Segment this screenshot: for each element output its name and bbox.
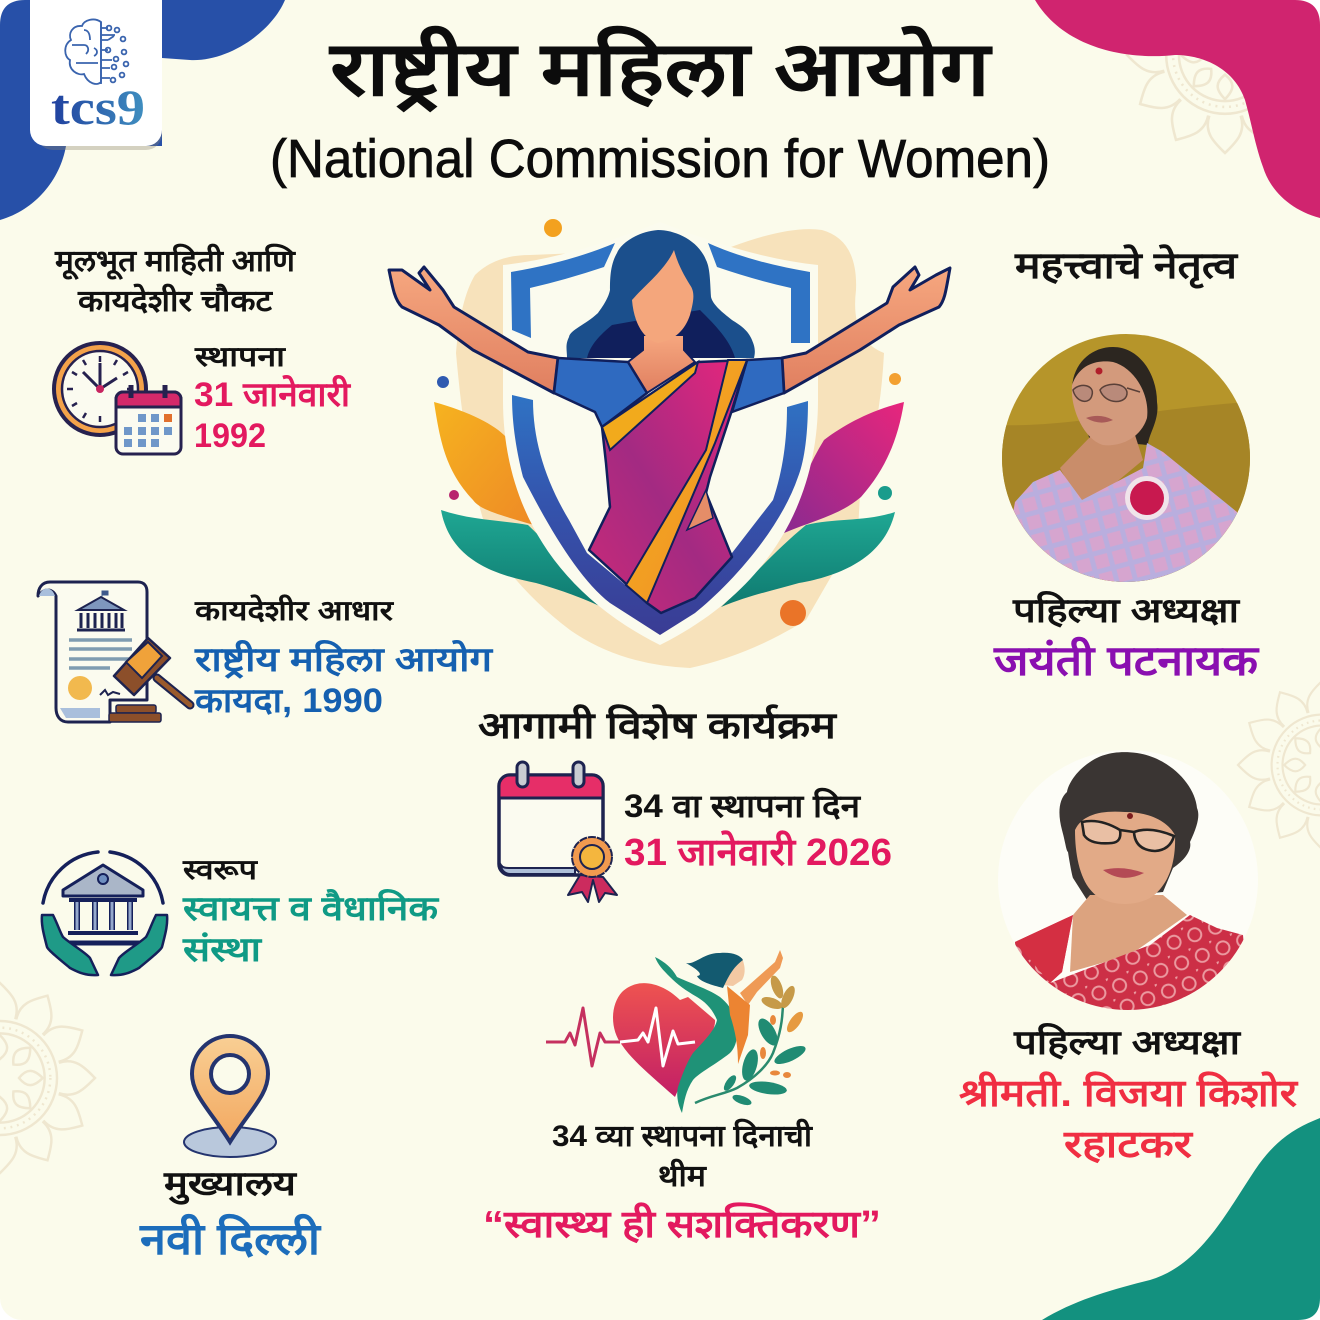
subtitle: (National Commission for Women) [270, 129, 1050, 189]
status [182, 854, 440, 969]
leaf: teal right [721, 512, 895, 607]
backdrop blob [456, 229, 884, 668]
corner: top left blue [0, 0, 285, 220]
heart pulse [620, 1008, 695, 1066]
waist [687, 490, 713, 530]
hair [566, 230, 755, 358]
headquarters [139, 1165, 322, 1264]
theme label: 34 व्या स्थापना दिनाची [552, 1118, 813, 1153]
leaf: pink [784, 402, 904, 533]
event name and date: 34 वा स्थापना दिन [624, 787, 861, 824]
left arm [389, 267, 558, 393]
current chairperson name: रहाटकर [1063, 1124, 1194, 1166]
neck [1060, 436, 1143, 500]
founding date: 1992 [194, 417, 266, 455]
lips [1103, 868, 1144, 878]
founding date: स्थापना [194, 341, 287, 372]
icon: brain [65, 19, 128, 84]
corner: top right pink [1035, 0, 1320, 218]
neck [1070, 895, 1187, 972]
first chairperson name: जयंती पटनायक [993, 636, 1260, 684]
hair [1059, 752, 1198, 900]
icon: clock and calendar [54, 343, 181, 454]
hair [1072, 347, 1157, 445]
tan leaves [760, 974, 806, 1078]
bindi [1127, 813, 1133, 819]
theme quote: “स्वास्थ्य ही सशक्तिकरण” [483, 1202, 881, 1246]
rose [1125, 476, 1169, 520]
logo text: tcs9 [51, 79, 145, 135]
pulse line [546, 1008, 620, 1066]
legal basis: कायदा, 1990 [194, 682, 383, 720]
hair shadow [587, 310, 735, 358]
current chairperson name [959, 1022, 1299, 1166]
legal basis: राष्ट्रीय महिला आयोग [194, 639, 494, 679]
section heading: basic info: कायदेशीर चौकट [77, 283, 274, 318]
woman body [655, 957, 737, 1113]
legal basis: कायदेशीर आधार [194, 594, 395, 626]
icon: heart and woman [546, 950, 808, 1113]
status: स्वायत्त व वैधानिक [182, 888, 440, 928]
section heading: basic info: मूलभूत माहिती आणि [54, 243, 296, 280]
saree border long [626, 360, 747, 603]
blouse left [554, 358, 647, 427]
heart [613, 983, 715, 1097]
event name and date: 31 जानेवारी 2026 [624, 830, 892, 874]
founding date [194, 341, 351, 455]
woman face [722, 958, 745, 986]
founding date: 31 जानेवारी [194, 374, 351, 414]
neck [628, 335, 695, 393]
blouse right [732, 358, 784, 412]
glasses [1082, 821, 1174, 851]
woman orange dress [727, 986, 750, 1064]
mandala: right decoration [1238, 681, 1320, 849]
current chairperson name: पहिल्या अध्यक्षा [1013, 1022, 1241, 1062]
right hand [111, 915, 167, 975]
headquarters: नवी दिल्ली [139, 1213, 322, 1264]
teal leaves [722, 1016, 808, 1107]
face [632, 250, 693, 343]
shield halo and interior [503, 222, 818, 645]
woman hair [686, 953, 743, 988]
woman right arm [740, 950, 783, 1005]
legal basis [194, 594, 494, 720]
shield top right [708, 243, 810, 343]
leaf: teal left [441, 510, 602, 607]
glasses [1073, 384, 1140, 402]
sari [1015, 915, 1250, 1015]
face [1072, 361, 1147, 445]
photo: first chairperson [1000, 334, 1252, 584]
icon: institution in hands [42, 852, 167, 975]
event name and date [624, 787, 892, 874]
first chairperson name: पहिल्या अध्यक्षा [1012, 590, 1240, 630]
logo card [30, 0, 162, 150]
theme label: थीम [658, 1158, 707, 1193]
heading: upcoming events: आगामी विशेष कार्यक्रम [478, 704, 838, 746]
mandala: top right decoration [1127, 0, 1320, 153]
corner: bottom right teal [1042, 1118, 1320, 1320]
current chairperson name: श्रीमती. विजया किशोर [959, 1071, 1299, 1115]
left hand [42, 915, 98, 975]
theme label [552, 1118, 813, 1193]
shield top left [511, 243, 615, 338]
first chairperson name [993, 590, 1260, 684]
saree [589, 360, 747, 613]
lips [1086, 416, 1113, 423]
leaf: orange [434, 402, 534, 525]
shield lower [512, 395, 808, 635]
face [1075, 812, 1175, 904]
right arm [782, 267, 950, 393]
icon: scroll and gavel [38, 582, 190, 722]
bindi [1096, 368, 1102, 374]
photo: current chairperson [998, 750, 1258, 1015]
central illustration [389, 219, 950, 668]
icon: calendar with badge [499, 762, 617, 902]
mandala: left decoration [0, 983, 95, 1173]
headquarters: मुख्यालय [163, 1165, 298, 1205]
sari [1014, 443, 1238, 582]
status: स्वरूप [182, 854, 258, 885]
dots [437, 219, 901, 626]
title: राष्ट्रीय महिला आयोग [328, 25, 994, 113]
saree border top [602, 362, 698, 450]
heading: leadership: महत्त्वाचे नेतृत्व [1014, 244, 1239, 289]
status: संस्था [182, 931, 262, 969]
icon: map pin [184, 1036, 276, 1157]
section heading: basic info [54, 243, 296, 318]
branch [695, 1000, 783, 1103]
